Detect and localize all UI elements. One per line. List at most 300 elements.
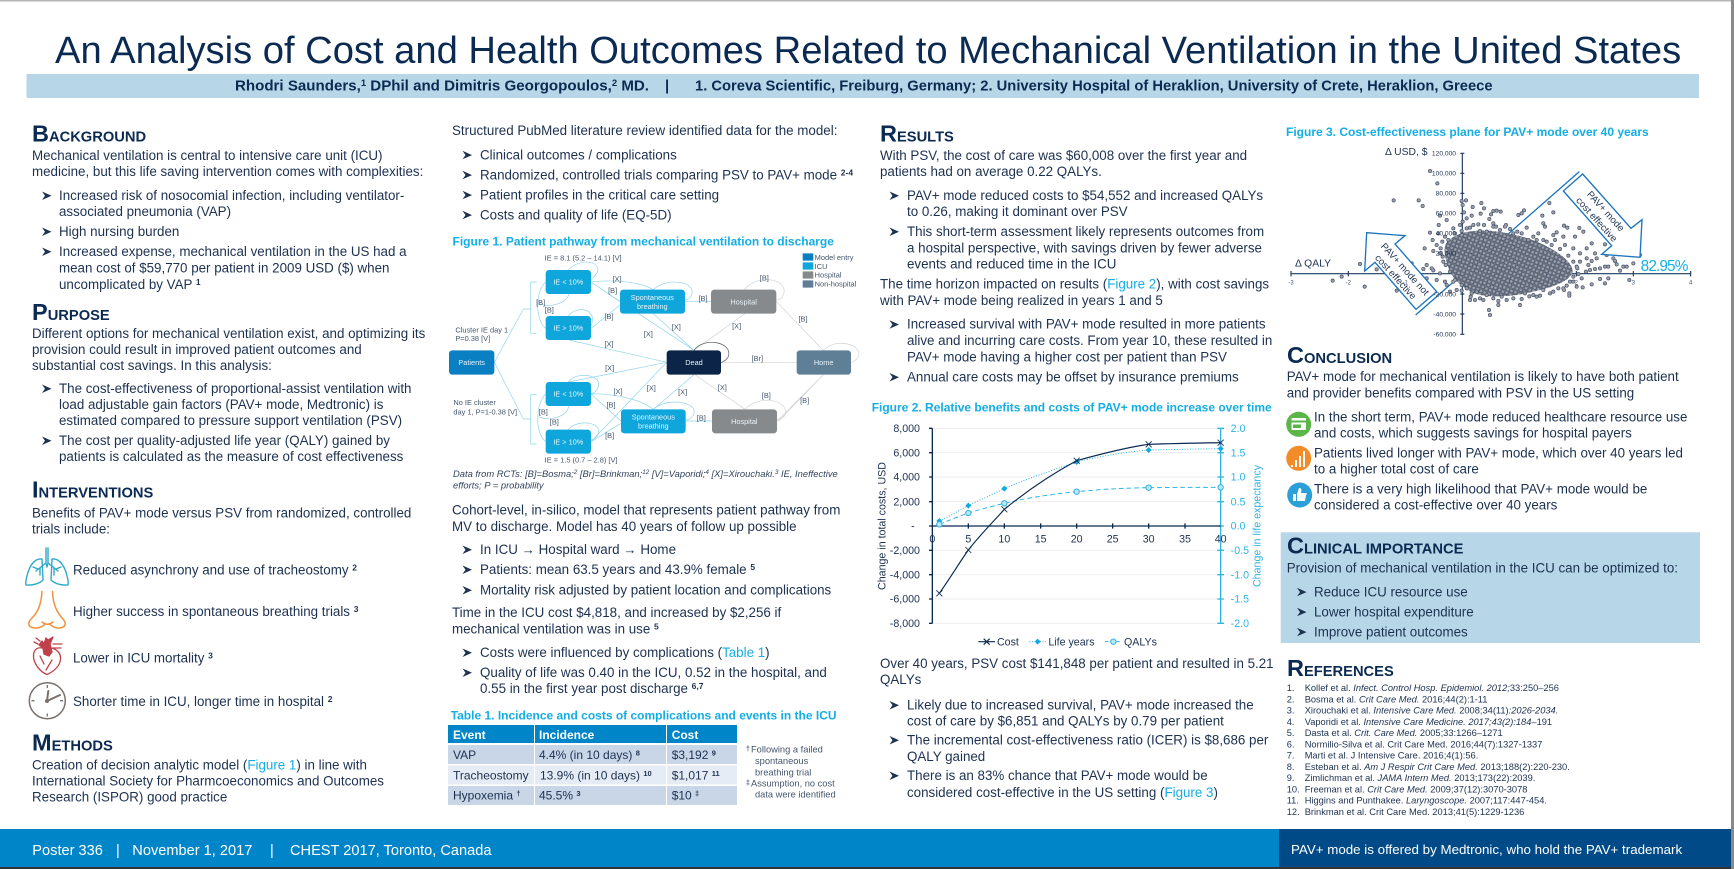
table 1: 11 bbox=[712, 769, 720, 778]
list: analysis: The cost per quality-adjusted life year (QALY) gained by bbox=[59, 433, 390, 448]
right axis labels: 1.0 bbox=[1231, 472, 1246, 484]
list: references: 1. bbox=[1287, 683, 1294, 693]
list: 40 year findings: There is an 83% chance that PAV+ mode would be bbox=[907, 768, 1208, 783]
list: short term results: PAV+ mode reduced costs to $54,552 and increased QALYs bbox=[907, 188, 1263, 203]
footer: poster details: CHEST 2017, Toronto, Canada bbox=[290, 843, 492, 859]
icon: heart bbox=[33, 637, 62, 674]
list: analysis: estimated compared to pressure support ventilation (PSV) bbox=[59, 413, 402, 428]
text: ICU cost bbox=[452, 605, 782, 636]
list: complexities: uncomplicated by VAP bbox=[59, 277, 192, 292]
list: complexities bbox=[42, 188, 407, 292]
legend: QALYs bbox=[1124, 636, 1157, 648]
text: conclusion 3: considered a cost-effective over 40 years bbox=[1314, 498, 1558, 513]
author band bbox=[26, 74, 1699, 98]
nodes: breathing bbox=[638, 421, 669, 430]
list: clinical goals: Improve patient outcomes bbox=[1314, 624, 1468, 639]
text: benefit 1: Reduced asynchrony and use of tracheostomy bbox=[73, 562, 349, 577]
x axis labels: -1 bbox=[1403, 280, 1409, 286]
arrow: not cost effective: PAV+ mode not bbox=[1378, 241, 1431, 298]
x axis labels: 3 bbox=[1632, 280, 1636, 286]
legend: ICU bbox=[815, 262, 827, 271]
list: model details bbox=[462, 542, 832, 598]
left axis labels: 2,000 bbox=[893, 496, 920, 508]
list: costs and quality bbox=[462, 645, 827, 696]
list: references: Zimlichman et al. JAMA Intern Med. 2013;173(22):2039. bbox=[1305, 773, 1535, 783]
right axis labels: -0.5 bbox=[1231, 545, 1249, 557]
left axis labels: 6,000 bbox=[893, 447, 920, 459]
panel: references bbox=[1287, 655, 1570, 817]
list: references: Brinkman et al. Crit Care Med. 2013;41(5):1229-1236 bbox=[1305, 807, 1524, 817]
text: benefit 3: Lower in ICU mortality bbox=[73, 651, 204, 666]
nodes: Spontaneous bbox=[631, 293, 674, 302]
edge labels: [X] bbox=[647, 384, 656, 393]
connections bbox=[494, 262, 712, 444]
list: data sources: Clinical outcomes / complications bbox=[480, 147, 677, 162]
table 1: 9 bbox=[712, 748, 716, 758]
panel: literature review bbox=[452, 123, 853, 222]
text: benefit 4: Shorter time in ICU, longer time in hospital bbox=[73, 694, 324, 709]
text: conclusion 1 bbox=[1314, 410, 1687, 441]
text: methods body bbox=[32, 757, 384, 804]
list: references: Dasta et al. Crit. Care Med. 2005;33:1266–1271 bbox=[1305, 728, 1503, 738]
left axis labels bbox=[890, 423, 920, 630]
text: conclusion 3 bbox=[1314, 482, 1647, 513]
list: 40 year findings: The incremental cost-effectiveness ratio (ICER) is $8,686 per bbox=[907, 732, 1269, 748]
x axis labels: -2 bbox=[1346, 280, 1352, 286]
list: references bbox=[1287, 683, 1570, 817]
y axis labels: 80,000 bbox=[1436, 191, 1456, 198]
text: conclusion 2: to a higher total cost of care bbox=[1314, 462, 1479, 477]
heading: background: BACKGROUND bbox=[32, 121, 146, 147]
icon: cost chart bbox=[1286, 446, 1311, 471]
list: long term results: PAV+ mode having a higher cost per patient than PSV bbox=[907, 349, 1227, 364]
list: data sources: Costs and quality of life (EQ-5D) bbox=[480, 207, 672, 222]
chart: costs and benefits over time bbox=[877, 423, 1263, 648]
nodes: Patients bbox=[458, 358, 485, 367]
edge labels: [X] bbox=[612, 275, 622, 284]
x axis labels: 20 bbox=[1071, 534, 1083, 546]
axes bbox=[1291, 153, 1691, 334]
left axis labels: 4,000 bbox=[893, 472, 920, 484]
text: methods body: International Society for Pharmcoeconomics and Outcomes bbox=[32, 773, 384, 788]
x axis labels: 4 bbox=[1689, 280, 1693, 286]
right axis labels: 2.0 bbox=[1231, 423, 1246, 435]
right axis labels: -1.0 bbox=[1231, 569, 1249, 581]
x axis labels: 40 bbox=[1215, 534, 1227, 546]
left axis labels: -4,000 bbox=[890, 569, 920, 581]
edge labels: [X] bbox=[678, 387, 687, 396]
list: model details: In ICU → Hospital ward → Home bbox=[480, 542, 676, 557]
text: 40 year results: QALYs bbox=[880, 672, 922, 687]
table 1: 45.5% bbox=[539, 788, 573, 802]
text: purpose intro bbox=[32, 326, 426, 373]
arrow: cost effective: cost effective bbox=[1573, 195, 1619, 245]
list: references: 9. bbox=[1287, 773, 1294, 783]
table 1: Event bbox=[453, 728, 486, 742]
text: background intro: Mechanical ventilation is central to intensive care unit (ICU) bbox=[32, 148, 382, 163]
x axis labels: 35 bbox=[1179, 534, 1191, 546]
list: references: 2. bbox=[1287, 694, 1294, 704]
table footnotes: Following a failed bbox=[751, 745, 823, 755]
author band: 2 bbox=[612, 78, 617, 89]
nodes: Dead bbox=[685, 358, 703, 367]
series: life years bbox=[936, 446, 1224, 524]
heading: methods: METHODS bbox=[32, 730, 113, 756]
edge labels: [B] bbox=[800, 396, 809, 405]
series: cost bbox=[936, 440, 1224, 596]
text: model description bbox=[452, 502, 840, 534]
scatter points bbox=[1333, 171, 1640, 315]
legend bbox=[803, 253, 857, 288]
x axis labels: 30 bbox=[1143, 534, 1155, 546]
list: references: Xirouchaki et al. Intensive Care Med. 2008;34(11):2026-2034. bbox=[1305, 706, 1558, 716]
text: time horizon: with PAV+ mode being realized in years 1 and 5 bbox=[879, 293, 1163, 308]
edge labels: [B] bbox=[698, 294, 708, 303]
right axis title: Change in life expectancy bbox=[1251, 464, 1263, 587]
edge labels: [B] bbox=[798, 314, 808, 323]
nodes: Hospital bbox=[730, 298, 757, 307]
footer: poster details: | bbox=[116, 843, 120, 859]
text: background intro bbox=[32, 148, 423, 179]
left axis labels: - bbox=[911, 521, 915, 533]
x axis labels: 0 bbox=[929, 534, 935, 546]
list: references: 11. bbox=[1287, 796, 1299, 806]
nodes: IE > 10% bbox=[553, 324, 584, 333]
y axis labels bbox=[1432, 151, 1456, 339]
title: An Analysis of Cost and Health Outcomes Related to Mechanical Ventilation in the United States bbox=[55, 29, 1681, 72]
x axis labels: 10 bbox=[998, 534, 1010, 546]
table footnotes: † bbox=[746, 746, 750, 753]
nodes: Hospital bbox=[731, 417, 758, 426]
nodes: breathing bbox=[637, 302, 668, 311]
nodes: IE < 10% bbox=[553, 390, 584, 399]
list: references: Bosma et al. Crit Care Med. 2016;44(2):1-11 bbox=[1305, 694, 1487, 704]
edge labels: [X] bbox=[732, 321, 741, 330]
x axis labels: -3 bbox=[1288, 280, 1294, 286]
edge labels bbox=[536, 273, 809, 440]
table 1: $10 bbox=[672, 788, 692, 802]
legend: Cost bbox=[997, 636, 1019, 648]
footer: trademark: PAV+ mode is offered by Medtronic, who hold the PAV+ trademark bbox=[1291, 842, 1682, 857]
edge labels: [B] bbox=[550, 417, 559, 426]
parameter labels: Cluster IE day 1 bbox=[455, 325, 508, 334]
author band: 1 bbox=[361, 78, 367, 89]
y axis labels: -20,000 bbox=[1433, 291, 1456, 298]
table 1: Tracheostomy bbox=[453, 768, 529, 782]
nodes bbox=[449, 270, 851, 454]
figure 1 caption: 12 bbox=[642, 469, 650, 476]
x axis labels bbox=[1288, 280, 1693, 286]
table 1: 8 bbox=[636, 748, 640, 758]
right axis labels: 0.0 bbox=[1231, 521, 1246, 533]
author band: 1. Coreva Scientific, Freiburg, Germany; 2. University Hospital of Heraklion, University of Crete, Heraklion, Greece bbox=[695, 78, 1493, 94]
parameter labels: P=0.38 [V] bbox=[455, 334, 490, 343]
list: model details: Mortality risk adjusted by patient location and complications bbox=[480, 582, 832, 598]
text: 40 year results: Over 40 years, PSV cost $141,848 per patient and resulted in 5.21 bbox=[880, 656, 1274, 671]
icon: nose bbox=[29, 592, 65, 628]
edge labels: [X] bbox=[604, 340, 614, 349]
y axis labels: 40,000 bbox=[1436, 231, 1456, 238]
list: analysis: patients is calculated as the measure of cost effectiveness bbox=[59, 449, 404, 464]
text: benefit 2: 3 bbox=[354, 604, 359, 614]
panel: clinical importance bbox=[1281, 532, 1700, 643]
text: conclusion 2 bbox=[1314, 446, 1683, 477]
list: data sources: 2-4 bbox=[841, 167, 853, 177]
list: references: Vaporidi et al. Intensive Care Medicine. 2017;43(2):184–191 bbox=[1305, 717, 1552, 727]
y axis labels: 20,000 bbox=[1436, 251, 1456, 258]
right axis labels: -2.0 bbox=[1231, 618, 1249, 630]
list: references: Freeman et al. Crit Care Med. 2009;37(12):3070-3078 bbox=[1305, 784, 1527, 794]
text: background intro: medicine, but this life saving intervention comes with complexities: bbox=[32, 164, 423, 179]
text: model description: MV to discharge. Model has 40 years of follow up possible bbox=[452, 519, 797, 534]
table footnotes bbox=[746, 745, 836, 800]
text: ICU cost: 5 bbox=[654, 622, 659, 632]
right axis labels: 1.5 bbox=[1231, 447, 1246, 459]
edge labels: [Br] bbox=[752, 354, 763, 363]
list: costs and quality: 0.55 in the first year post discharge bbox=[480, 681, 688, 696]
author band: MD. bbox=[617, 78, 649, 94]
text: benefit 3: 3 bbox=[208, 651, 213, 661]
text: conclusion 1: In the short term, PAV+ mode reduced healthcare resource use bbox=[1314, 410, 1687, 425]
figure 1 caption: [V]=Vaporidi; bbox=[649, 468, 706, 479]
nodes: IE > 10% bbox=[553, 437, 584, 446]
legend: Model entry bbox=[815, 253, 854, 262]
list: references: Marti et al. J Intensive Care. 2016;4(1):56. bbox=[1305, 750, 1478, 760]
parameter labels: IE = 8.1 (5.2 – 14.1) [V] bbox=[545, 254, 622, 263]
footer: poster details: | bbox=[270, 843, 274, 859]
x axis labels: 5 bbox=[965, 534, 971, 546]
list: data sources: Patient profiles in the critical care setting bbox=[480, 187, 719, 202]
text: benefit 1: 2 bbox=[352, 562, 357, 572]
edge labels: [B] bbox=[604, 312, 614, 321]
table 1: 3 bbox=[576, 789, 581, 798]
x axis labels: 15 bbox=[1035, 534, 1047, 546]
text: model description: Cohort-level, in-silico, model that represents patient pathway from bbox=[452, 502, 840, 518]
list: short term results: to 0.26, making it dominant over PSV bbox=[907, 204, 1128, 219]
arrow: cost effective: PAV+ mode bbox=[1584, 189, 1626, 234]
text: conclusion intro: PAV+ mode for mechanical ventilation is likely to have both patient bbox=[1287, 369, 1679, 384]
heading: clinical importance: CLINICAL IMPORTANCE bbox=[1287, 532, 1464, 558]
heading: results: RESULTS bbox=[880, 121, 954, 147]
list: short term results: This short-term assessment likely represents outcomes from bbox=[907, 224, 1264, 239]
nodes: Spontaneous bbox=[632, 413, 675, 422]
text: clinical intro: Provision of mechanical ventilation in the ICU can be optimized to: bbox=[1287, 560, 1678, 575]
list: complexities: Increased expense, mechanical ventilation in the US had a bbox=[59, 244, 407, 259]
list: references: Esteban et al. Am J Respir Crit Care Med. 2013;188(2):220-230. bbox=[1305, 762, 1570, 772]
footer: poster details bbox=[32, 843, 492, 859]
axis titles: Δ QALY bbox=[1295, 259, 1331, 270]
arrow: cost effective bbox=[1563, 174, 1642, 257]
table footnotes: spontaneous bbox=[755, 756, 809, 766]
y axis labels: 120,000 bbox=[1432, 151, 1456, 158]
table 1: $1,017 bbox=[672, 768, 708, 782]
text: conclusion intro: and provider benefits compared with PSV in the US setting bbox=[1287, 385, 1634, 400]
arrow: not cost effective: cost effective bbox=[1372, 253, 1418, 302]
edge labels: [B] bbox=[545, 305, 554, 314]
legend bbox=[978, 636, 1157, 648]
text: methods body: Creation of decision analytic model (Figure 1) in line with bbox=[32, 757, 367, 772]
figure 1 caption: 3 bbox=[775, 469, 779, 476]
list: data sources: Randomized, controlled trials comparing PSV to PAV+ mode bbox=[480, 167, 837, 182]
x axis labels: 25 bbox=[1107, 534, 1119, 546]
figure 1 caption: 2 bbox=[573, 469, 578, 476]
footer: poster details: November 1, 2017 bbox=[132, 843, 252, 859]
list: clinical goals: Reduce ICU resource use bbox=[1314, 584, 1468, 599]
right axis labels: -1.5 bbox=[1231, 594, 1249, 606]
left axis bbox=[929, 428, 932, 623]
list: references: 7. bbox=[1287, 750, 1294, 760]
legend: Life years bbox=[1048, 636, 1095, 648]
list: costs and quality: Quality of life was 0.40 in the ICU, 0.52 in the hospital, and bbox=[480, 665, 827, 680]
parameter labels: day 1, P=1-0.38 [V] bbox=[453, 407, 517, 416]
table 1: 4.4% (in 10 days) bbox=[539, 748, 632, 762]
figure 1 caption: 4 bbox=[705, 469, 709, 476]
heading: interventions: INTERVENTIONS bbox=[32, 477, 154, 503]
panel: purpose bbox=[32, 299, 426, 464]
list: short term results bbox=[890, 188, 1264, 272]
text: first year results: With PSV, the cost of care was $60,008 over the first year and bbox=[880, 148, 1247, 163]
text: first year results: patients had on average 0.22 QALYs. bbox=[880, 164, 1102, 179]
table 1: ‡ bbox=[695, 789, 699, 798]
icon: clock bbox=[29, 683, 65, 719]
list: long term results: Annual care costs may be offset by insurance premiums bbox=[907, 370, 1239, 384]
list: 40 year findings: cost of care by $6,851 and QALYs by 0.79 per patient bbox=[907, 714, 1224, 728]
list: references: 3. bbox=[1287, 706, 1294, 716]
arrow: not cost effective bbox=[1365, 233, 1437, 309]
text: purpose intro: provision could result in improved patient outcomes and bbox=[32, 342, 362, 357]
threshold line bbox=[1416, 172, 1579, 315]
list: model details: Patients: mean 63.5 years and 43.9% female bbox=[480, 562, 747, 577]
x axis labels: 2 bbox=[1575, 280, 1579, 286]
text: time horizon: The time horizon impacted on results (Figure 2), with cost savings bbox=[880, 277, 1269, 292]
icon: lungs bbox=[26, 548, 68, 585]
grid lines bbox=[932, 428, 1221, 623]
parameter labels bbox=[453, 254, 622, 464]
nodes: Home bbox=[814, 358, 833, 367]
figure 1 caption: efforts; P = probability bbox=[453, 480, 545, 491]
edge labels: [B] bbox=[605, 431, 614, 440]
legend: Hospital bbox=[815, 271, 842, 280]
nodes: IE < 10% bbox=[553, 278, 584, 287]
y axis labels: -40,000 bbox=[1433, 311, 1456, 318]
y axis labels: 60,000 bbox=[1436, 211, 1456, 218]
list: short term results: a hospital perspective, with savings driven by fewer adverse bbox=[907, 240, 1262, 255]
series: QALYs bbox=[937, 485, 1223, 527]
list: costs and quality: 6,7 bbox=[692, 681, 704, 691]
list: long term results: Increased survival with PAV+ mode resulted in more patients bbox=[907, 317, 1266, 332]
edge labels: [X] bbox=[613, 387, 623, 396]
table 1: 10 bbox=[643, 769, 652, 778]
table 1: Cost bbox=[672, 728, 698, 742]
table footnotes: breathing trial bbox=[755, 767, 811, 777]
list: costs and quality: Costs were influenced by complications (Table 1) bbox=[480, 645, 770, 660]
figure 1 caption: IE, Ineffective bbox=[778, 468, 838, 479]
figure 1 caption: [Br]=Brinkman; bbox=[577, 468, 643, 479]
panel: results bbox=[879, 121, 1272, 384]
table 1 bbox=[448, 725, 737, 805]
list: references: Higgins and Punthakee. Laryngoscope. 2007;117:447-454. bbox=[1305, 796, 1547, 806]
footer: poster details: Poster 336 bbox=[32, 843, 103, 859]
edge labels: [X] bbox=[672, 322, 681, 331]
text: literature intro: Structured PubMed literature review identified data for the model: bbox=[452, 123, 837, 138]
list: references: 8. bbox=[1287, 762, 1294, 772]
chart: patient pathway diagram bbox=[449, 253, 859, 464]
list: data sources bbox=[462, 147, 853, 222]
edge labels: [B] bbox=[536, 298, 545, 307]
table 1: 13.9% (in 10 days) bbox=[540, 768, 640, 782]
list: long term results: alive and incurring care costs. From year 10, these resulted in bbox=[907, 333, 1272, 348]
author band: Rhodri Saunders, bbox=[235, 78, 361, 94]
list: complexities: 1 bbox=[196, 277, 201, 287]
panel: cohort model bbox=[452, 502, 840, 696]
chart: cost-effectiveness plane bbox=[1288, 147, 1693, 339]
table 1: Incidence bbox=[539, 728, 595, 742]
panel: methods bbox=[32, 730, 384, 804]
list: complexities: Increased risk of nosocomial infection, including ventilator- bbox=[59, 188, 404, 203]
table footnotes: Assumption, no cost bbox=[751, 779, 835, 789]
right axis bbox=[1217, 428, 1224, 623]
left axis labels: 8,000 bbox=[893, 423, 920, 435]
right axis labels bbox=[1231, 423, 1249, 630]
table 1: VAP bbox=[453, 748, 476, 762]
list: 40 year findings: QALY gained bbox=[907, 749, 985, 764]
parameter labels: IE = 1.5 (0.7 – 2.8) [V] bbox=[545, 455, 617, 464]
list: analysis: load adjustable gain factors (PAV+ mode, Medtronic) is bbox=[59, 397, 384, 412]
list: long term results bbox=[890, 317, 1272, 384]
text: conclusion 2: Patients lived longer with PAV+ mode, which over 40 years led bbox=[1314, 446, 1683, 461]
heading: conclusion: CONCLUSION bbox=[1287, 342, 1392, 368]
parameter labels: No IE cluster bbox=[453, 398, 496, 407]
figure 3 heading: Figure 3. Cost-effectiveness plane for PAV+ mode over 40 years bbox=[1286, 125, 1649, 139]
table 1: $3,192 bbox=[672, 748, 708, 762]
text: ICU cost: mechanical ventilation was in use bbox=[452, 622, 650, 636]
list: analysis: The cost-effectiveness of proportional-assist ventilation with bbox=[59, 381, 411, 396]
text: purpose intro: Different options for mechanical ventilation exist, and optimizing its bbox=[32, 326, 426, 341]
list: references: 10. bbox=[1287, 784, 1300, 794]
heading: references: REFERENCES bbox=[1287, 655, 1394, 681]
y axis labels: 100,000 bbox=[1432, 171, 1456, 178]
heading: purpose: PURPOSE bbox=[32, 299, 110, 325]
text: conclusion intro bbox=[1287, 369, 1679, 400]
text: interventions intro: trials include: bbox=[32, 521, 110, 536]
edge labels: [B] bbox=[539, 408, 548, 417]
figure 2 heading: Figure 2. Relative benefits and costs of PAV+ mode increase over time bbox=[872, 401, 1272, 415]
left axis labels: -2,000 bbox=[890, 545, 920, 557]
list: 40 year findings: considered cost-effective in the US setting (Figure 3) bbox=[907, 785, 1218, 800]
right axis labels: 0.5 bbox=[1231, 496, 1246, 508]
figure 1 caption: Data from RCTs: [B]=Bosma; bbox=[453, 468, 574, 479]
text: conclusion 3: There is a very high likelihood that PAV+ mode would be bbox=[1314, 482, 1647, 497]
text: interventions intro bbox=[32, 505, 411, 536]
text: ICU cost: Time in the ICU cost $4,818, and increased by $2,256 if bbox=[452, 605, 782, 620]
list: references: 5. bbox=[1287, 728, 1294, 738]
table footnotes: data were identified bbox=[755, 790, 836, 800]
list: short term results: events and reduced time in the ICU bbox=[907, 257, 1116, 272]
list: references: 4. bbox=[1287, 717, 1294, 727]
axis titles bbox=[1295, 147, 1428, 270]
author band: | bbox=[665, 78, 669, 94]
list: references: Normilio-Silva et al. Crit Care Med. 2016;44(7):1327-1337 bbox=[1305, 739, 1542, 749]
list: complexities: High nursing burden bbox=[59, 224, 179, 239]
list: references: 6. bbox=[1287, 739, 1294, 749]
y axis labels: -60,000 bbox=[1433, 332, 1456, 339]
panel: background bbox=[32, 121, 423, 292]
value: 82.95%: 82.95% bbox=[1641, 258, 1689, 275]
icon: thumbs up bbox=[1287, 482, 1312, 508]
edge labels: [B] bbox=[608, 286, 617, 295]
text: benefit 2: Higher success in spontaneous breathing trials bbox=[73, 604, 350, 619]
legend: Non-hospital bbox=[815, 279, 857, 288]
